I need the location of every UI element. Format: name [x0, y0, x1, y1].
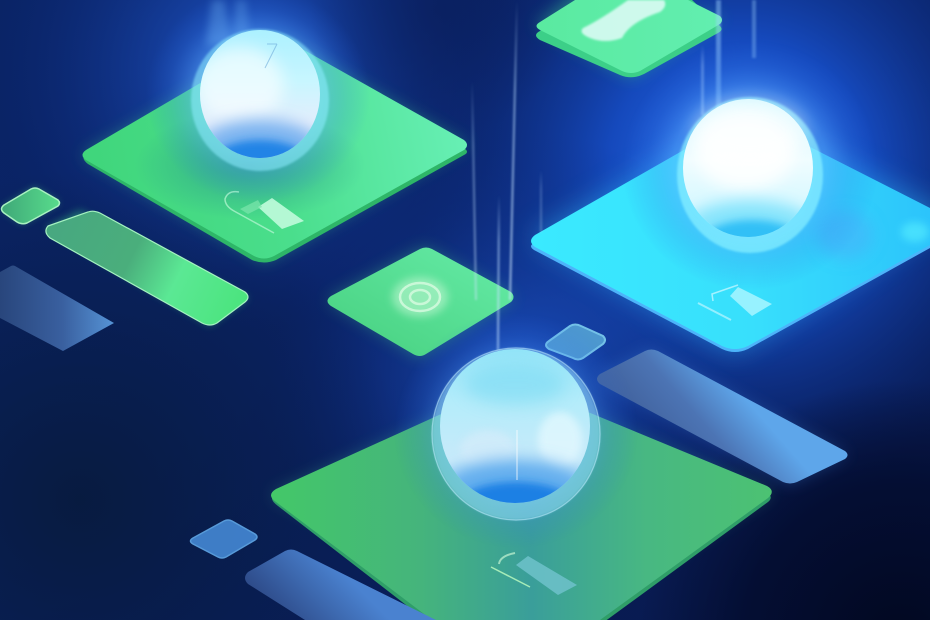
sphere: top-right [632, 64, 868, 280]
chip: long blue bar bottom [245, 550, 436, 620]
panel: top small green card [536, 0, 723, 78]
icon: pill on small green card [582, 0, 665, 41]
sphere: top-left [156, 0, 361, 194]
chip: blue bar left [0, 266, 114, 351]
panel: bottom green platform [270, 384, 773, 620]
light streaks [471, 0, 756, 350]
icon: label on cyan platform [698, 285, 772, 320]
panel: top-left green platform [82, 39, 468, 262]
chip: small green left [1, 187, 60, 224]
chip: long green bar left [45, 210, 249, 326]
panel: centre green card [327, 247, 514, 357]
chip: long blue bar right [597, 349, 848, 484]
icon: round badge [392, 277, 448, 317]
chip: small blue bottom [190, 520, 257, 558]
icon: pill label on green platform [225, 192, 304, 233]
panel: top-right cyan platform [530, 116, 930, 352]
sphere: bottom-centre [406, 330, 625, 534]
streak through sphere [516, 430, 518, 480]
icon: label on bottom platform [491, 553, 577, 595]
chip: small blue centre [546, 324, 605, 360]
